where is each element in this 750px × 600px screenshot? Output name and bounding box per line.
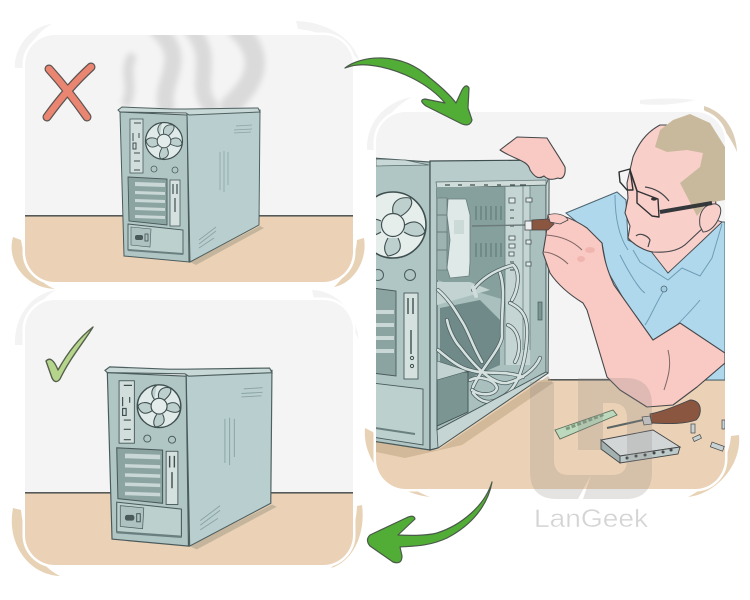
motherboard back wall (437, 187, 505, 300)
panel: correct placement, cool computer (12, 290, 363, 576)
icon: green check mark (46, 327, 93, 382)
panel: wrong placement, overheating computer (12, 21, 365, 289)
psu front (372, 383, 423, 445)
icon: red cross (47, 67, 91, 117)
man: shirt (566, 192, 725, 380)
watermark logo (530, 378, 652, 499)
arrow: from overheating panel to repair panel (345, 58, 472, 125)
far arm behind hand (550, 255, 592, 276)
computer tower (105, 367, 277, 550)
computer case open (360, 158, 549, 450)
computer tower (118, 107, 264, 265)
wall and table (376, 112, 725, 380)
white heat sink block (447, 199, 470, 278)
arrow: from repair panel to correct panel (368, 482, 492, 563)
RAM stick on table (555, 410, 617, 439)
panel: man repairing computer (360, 97, 739, 497)
watermark text: LanGeek (534, 505, 649, 533)
man: glasses (619, 169, 712, 217)
screwdriver in hand (472, 219, 554, 230)
man: left hand on case (500, 137, 565, 179)
port panel (404, 293, 418, 379)
fingers gripping (548, 214, 568, 224)
steam rising from computer (127, 30, 255, 106)
man: head (625, 125, 716, 252)
dark lower chamber (440, 300, 500, 378)
cable bundle (438, 265, 540, 402)
man: neck (650, 215, 722, 273)
screws on table (691, 420, 725, 451)
slot covers (376, 288, 396, 376)
metal box on table (601, 430, 680, 463)
screwdriver on table (607, 400, 700, 428)
right frame edge (546, 177, 549, 373)
man: right arm (543, 215, 725, 407)
case fan (376, 191, 427, 259)
power supply bay (437, 372, 468, 426)
